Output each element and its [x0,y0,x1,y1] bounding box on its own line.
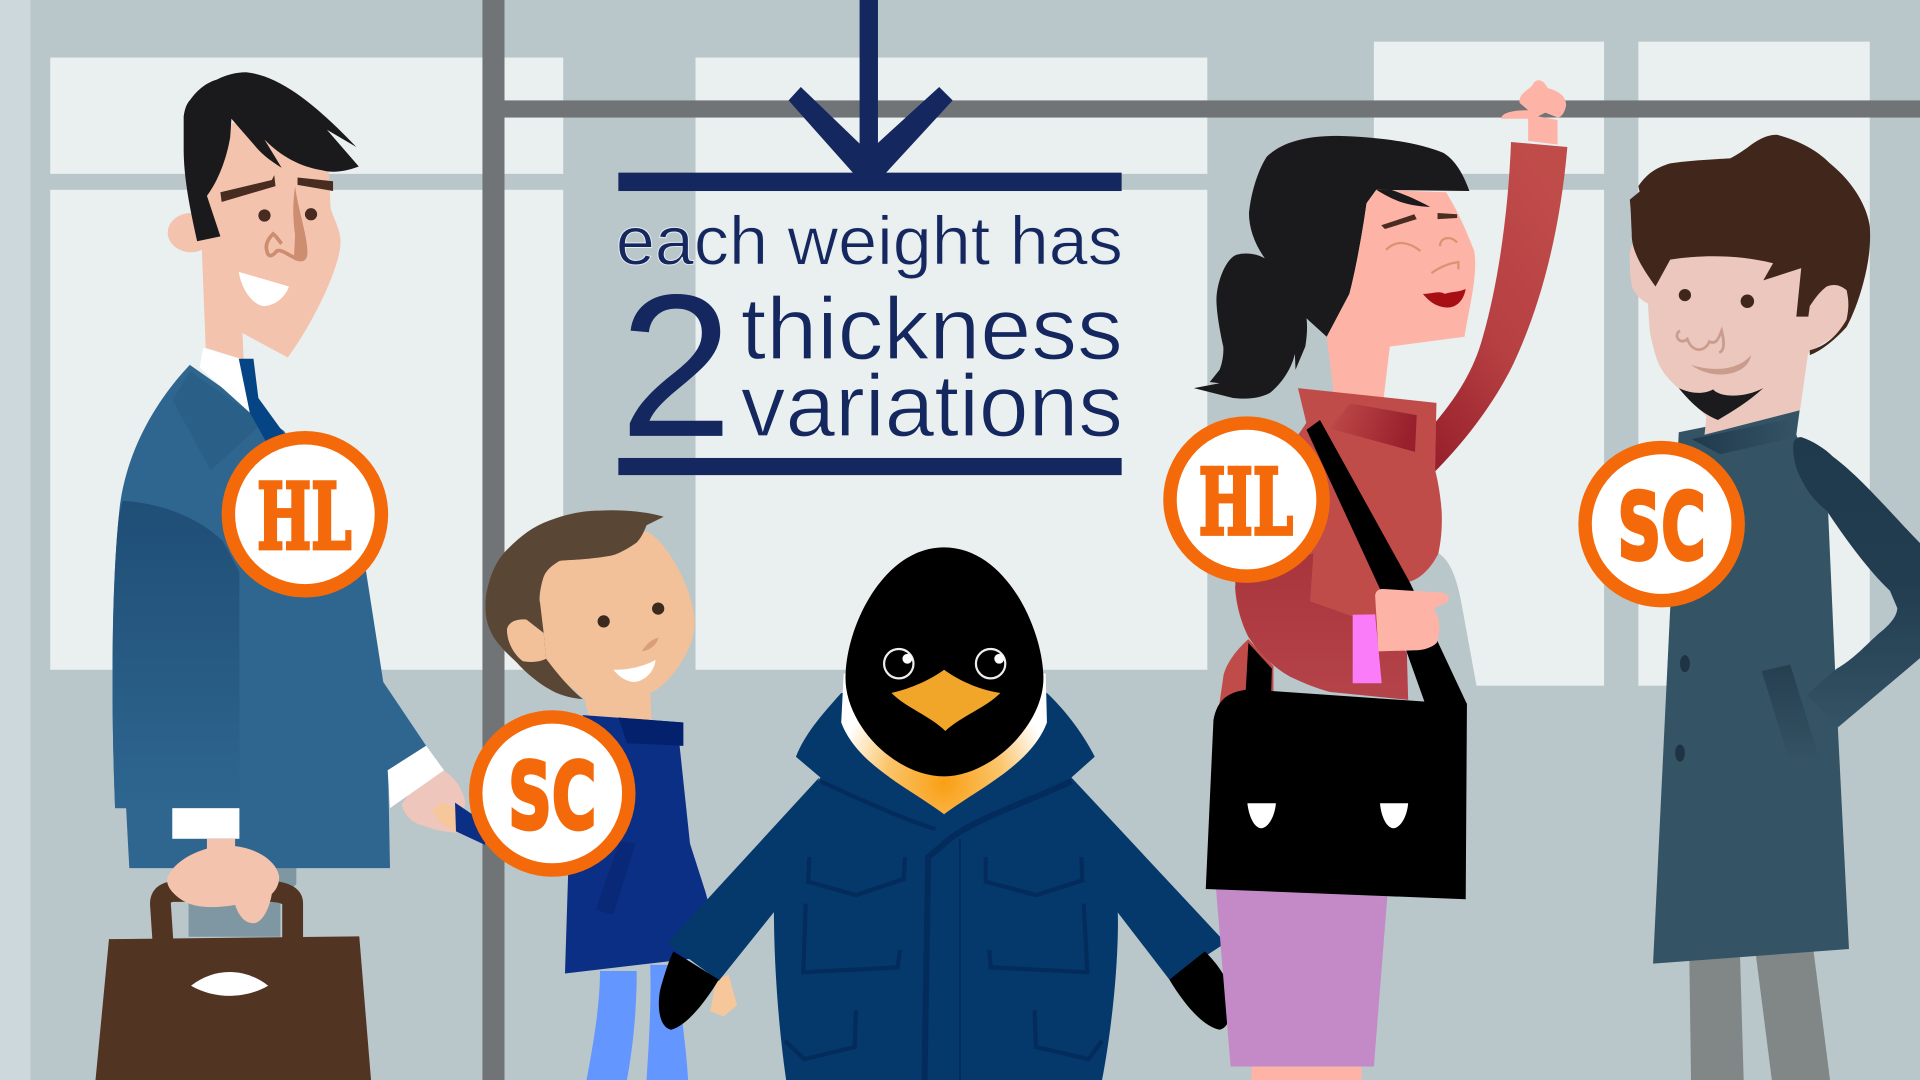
bag clasps [1247,803,1408,828]
hood [796,693,1095,827]
lips [1423,289,1466,308]
neck and face [202,122,341,360]
far hand [710,975,737,1016]
goatee [1679,388,1763,420]
raised arm [1429,142,1567,473]
badge: SC boy: SC [508,743,596,850]
right flipper [1169,951,1231,1030]
hair [184,72,359,241]
suit [112,365,426,868]
eyes [1679,289,1691,301]
neck [583,686,651,722]
badge: SC boy [476,717,629,870]
closed eyes and nose [1386,238,1458,273]
trouser legs [587,971,637,1080]
nose [1677,331,1724,353]
badge: HL woman: HL [1199,450,1293,556]
right cuff [388,746,444,808]
arm [455,803,487,845]
heading text [616,202,1123,480]
handbag [1206,689,1467,899]
back coat [1212,639,1273,759]
right hand [402,770,465,833]
left hand [167,839,279,923]
eyebrows [220,175,333,202]
woman with bag [1194,80,1567,1080]
nose [293,186,307,261]
ponytail and hair back [1194,136,1469,399]
man with briefcase [96,72,465,1080]
lapel [173,371,263,470]
beak [891,670,1000,731]
smile [1691,355,1751,375]
fringe [1376,190,1430,207]
coat body [774,722,1118,1080]
left sleeve [667,778,819,981]
badge: HL woman [1170,423,1323,576]
coat buttons [1680,655,1690,672]
skirt [1216,888,1387,1067]
pocket [1762,665,1818,764]
left wall strip [0,0,31,1080]
ear [168,213,214,252]
grey pole behind body [1409,553,1482,710]
hair [1630,135,1870,355]
jacket pocket [596,841,636,915]
smile [613,660,656,682]
man with goatee [1630,135,1920,1080]
heading text: variations [741,356,1123,455]
hair [485,510,664,699]
briefcase handle [160,891,293,940]
heading text: thickness [741,279,1123,378]
badge: HL man [228,438,381,591]
boy [455,510,737,1080]
ear [507,619,546,662]
left cuff [172,808,239,839]
dark arm [1793,437,1920,727]
pink tag [1353,614,1382,683]
collar shade [1692,418,1796,454]
coat [1653,408,1849,964]
heading text: 2 [620,253,733,480]
handrail [482,0,1920,1080]
briefcase clasp [191,972,268,996]
coat [1235,403,1442,699]
trousers [189,863,296,937]
eyes [258,209,271,222]
trouser legs [1689,955,1744,1080]
coat lower shade [1235,553,1408,700]
coat seams [785,781,1102,1080]
eyebrows [1381,213,1457,229]
face and neck [1630,233,1850,435]
face and neck [1327,190,1475,398]
head [536,531,694,702]
legs [1251,1063,1362,1080]
windows [50,42,1870,686]
boy's hand in man's hand [432,802,457,833]
badge: HL man: HL [257,465,351,571]
smile [239,272,289,306]
nose [642,637,659,651]
neck bib [841,673,1047,814]
right eye [976,649,1005,678]
bag strap [1307,420,1467,704]
hand on strap [1375,589,1449,651]
jacket [565,715,722,973]
head [845,547,1043,776]
suit sleeve shade [112,501,239,808]
raised hand [1501,80,1566,144]
briefcase [96,936,371,1080]
coat collar [1298,388,1436,471]
heading: down arrow and bars [618,0,1122,475]
right sleeve [1071,778,1226,980]
eyes [598,615,610,628]
penguin in coat [659,547,1231,1080]
left eye [884,649,913,678]
shirt collar [200,348,250,413]
heading text: each weight has [616,202,1123,279]
badge: SC goatee man: SC [1618,473,1706,580]
jacket collar [618,718,683,746]
tie [239,359,284,443]
badge: SC goatee man [1585,448,1738,601]
left flipper [659,951,719,1030]
